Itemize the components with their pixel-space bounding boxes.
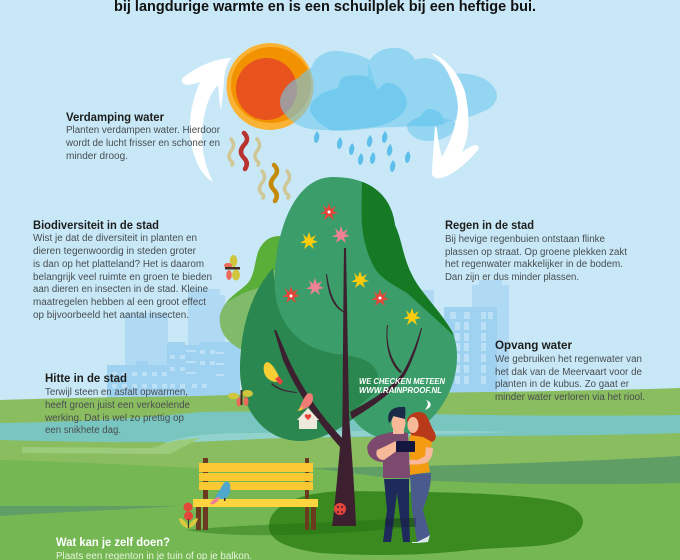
icon: butterfly upper bbox=[224, 255, 240, 280]
handwritten caption: WE CHECKEN METEEN bbox=[359, 376, 446, 386]
text: Regen in de stad: het regenwater makkelijker in de bodem. bbox=[445, 259, 623, 270]
bench bbox=[193, 458, 318, 530]
text: Opvang water: minder water verloren via het riool. bbox=[495, 392, 645, 403]
woman bbox=[400, 412, 436, 543]
leg shadow bbox=[385, 518, 416, 527]
phone bbox=[396, 441, 415, 452]
city skyline bbox=[107, 280, 509, 398]
text: Opvang water bbox=[495, 340, 645, 403]
text: Biodiversiteit in de stad: aan dieren en insecten in de stad. Kleine bbox=[33, 284, 208, 295]
tree bbox=[215, 170, 470, 526]
text: Hitte in de stad bbox=[44, 373, 190, 436]
text: Verdamping water: Verdamping water bbox=[66, 112, 165, 124]
dark crown bbox=[240, 268, 380, 441]
branches and trunk bbox=[271, 248, 422, 526]
text: Regen in de stad: Dan zijn er dus minder plassen. bbox=[445, 272, 579, 283]
icon: butterfly lower bbox=[228, 390, 253, 406]
text: Biodiversiteit in de stad: dieren tegenwoordig in steden groter bbox=[33, 246, 197, 257]
icon: birdhouse with pink bird bbox=[297, 393, 319, 429]
handwritten caption: WWW.RAINPROOF.NL bbox=[359, 385, 442, 395]
text: Verdamping water: Planten verdampen water. Hierdoor bbox=[66, 125, 221, 136]
text: Hitte in de stad: een snikhete dag. bbox=[45, 425, 121, 436]
handwritten caption bbox=[359, 376, 446, 410]
tree flowers bbox=[282, 203, 421, 325]
crown shadow side bbox=[362, 182, 454, 336]
heat waves bbox=[229, 133, 290, 201]
ground layers bbox=[0, 388, 680, 560]
text: Hitte in de stad: Hitte in de stad bbox=[45, 373, 127, 385]
text: Opvang water: planten in de kubus. Zo gaat er bbox=[495, 379, 630, 390]
man bbox=[367, 407, 410, 542]
arrow: rain down bbox=[431, 53, 479, 178]
text: Hitte in de stad: heeft groen juist een verkoelende bbox=[45, 400, 190, 411]
back bush bbox=[220, 236, 280, 350]
text: Biodiversiteit in de stad: is dan op het platteland? Het is daarom bbox=[33, 259, 204, 270]
icon: yellow bird bbox=[264, 362, 283, 385]
text: Regen in de stad: Regen in de stad bbox=[445, 220, 534, 232]
text: Verdamping water: wordt de lucht frisser en schoner en bbox=[65, 138, 220, 149]
light crown bbox=[275, 177, 457, 438]
icon: rain cloud bbox=[280, 48, 497, 141]
text: Biodiversiteit in de stad: Biodiversiteit in de stad bbox=[33, 220, 159, 232]
icon: tulips bbox=[179, 502, 198, 528]
text: Biodiversiteit in de stad: op bijvoorbeeld het aantal insecten. bbox=[33, 310, 189, 321]
text: Opvang water: We gebruiken het regenwater van bbox=[495, 354, 642, 365]
text: Regen in de stad bbox=[445, 220, 627, 283]
text: Wat kan je zelf doen: Wat kan je zelf doen? bbox=[56, 537, 170, 549]
text: Hitte in de stad: werking. Dat is wel zo prettig op bbox=[44, 413, 184, 424]
couple taking selfie bbox=[367, 407, 436, 543]
text: Wat kan je zelf doen bbox=[56, 537, 252, 560]
text: Opvang water: Opvang water bbox=[495, 340, 573, 352]
arrow: evaporation up bbox=[182, 58, 232, 182]
text: Opvang water: het dak van de Meervaart voor de bbox=[495, 367, 642, 378]
text: Biodiversiteit in de stad bbox=[33, 220, 212, 321]
text: Verdamping water bbox=[65, 112, 221, 162]
rain drops bbox=[314, 131, 410, 172]
text: Biodiversiteit in de stad: Wist je dat de diversiteit in planten en bbox=[33, 233, 197, 244]
text: Biodiversiteit in de stad: maatregelen hebben al een groot effect bbox=[33, 297, 206, 308]
text: Hitte in de stad: Terwijl steen en asfalt opwarmen, bbox=[45, 387, 188, 398]
text: Regen in de stad: Bij hevige regenbuien ontstaan flinke bbox=[445, 234, 605, 245]
icon: sun bbox=[226, 43, 314, 130]
text: Regen in de stad: plassen op straat. Op groene plekken zakt bbox=[445, 247, 627, 258]
icon: ladybug bbox=[334, 503, 346, 515]
text: Verdamping water: minder droog. bbox=[66, 151, 128, 162]
icon: blue bird on bench bbox=[210, 481, 230, 504]
text: Biodiversiteit in de stad: belangrijk veel ruimte en groen te bieden bbox=[33, 272, 212, 283]
